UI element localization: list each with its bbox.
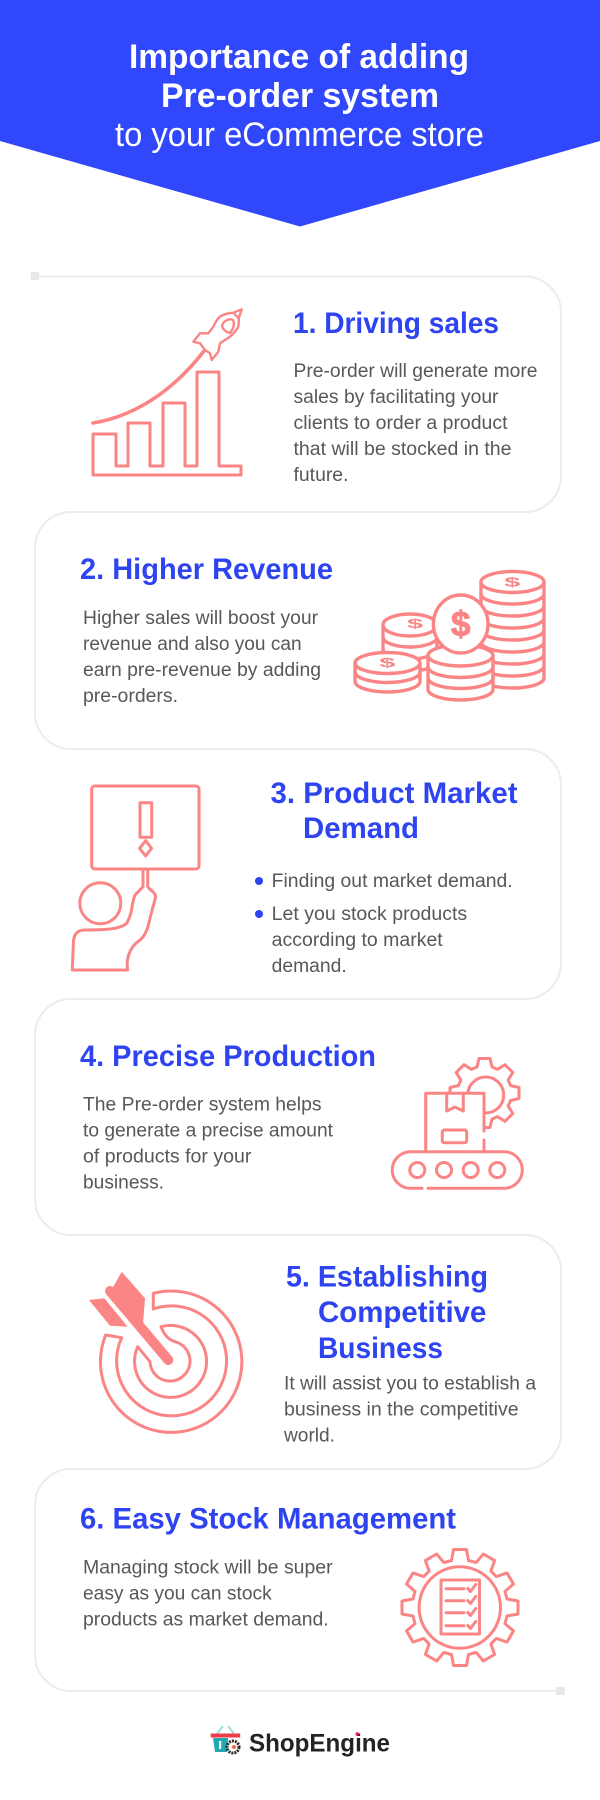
heading: Business (318, 1332, 443, 1365)
body text (283, 1374, 536, 1447)
panel: 4 precise production (80, 1040, 522, 1194)
body text: clients to order a product (294, 413, 508, 434)
heading (286, 1261, 488, 1365)
body text (294, 361, 538, 486)
title: Pre-order system (161, 77, 439, 115)
body text (83, 1095, 334, 1194)
body text: world. (283, 1426, 335, 1447)
heading (270, 777, 518, 845)
panel: 3 product market demand (72, 777, 518, 977)
body text: easy as you can stock (83, 1583, 272, 1604)
heading: 2. Higher Revenue (80, 553, 333, 586)
body text: of products for your (83, 1147, 252, 1168)
icon: coin stacks: $ (379, 656, 396, 670)
header banner (0, 0, 600, 226)
heading: 3. Product Market (270, 777, 518, 810)
icon: shopping basket with gear (211, 1726, 240, 1753)
icon: gear with checklist (402, 1550, 518, 1666)
bullet list: Let you stock products (272, 904, 467, 925)
serpentine card outline (31, 272, 565, 1695)
heading: 1. Driving sales (293, 307, 499, 340)
body text: pre-orders. (83, 686, 178, 707)
body text: products as market demand. (83, 1609, 329, 1630)
body text: Higher sales will boost your (83, 608, 319, 629)
panel: 2 higher revenue (80, 553, 544, 707)
bullet list (255, 871, 513, 977)
icon: rocket and bar chart (93, 309, 242, 475)
panel: 1 driving sales (93, 307, 538, 486)
icon: coin stacks: $ (451, 605, 470, 644)
icon: coin stacks: $ (407, 617, 424, 631)
heading: 4. Precise Production (80, 1040, 376, 1073)
title: Importance of adding (129, 38, 469, 76)
icon: coin stacks (355, 572, 544, 700)
title (115, 38, 484, 154)
icon: person holding sign (72, 786, 199, 970)
icon: target with arrow (89, 1272, 242, 1432)
title: to your eCommerce store (115, 116, 484, 154)
panel: 6 easy stock management (80, 1503, 518, 1666)
body text: sales by facilitating your (294, 387, 499, 408)
body text: earn pre-revenue by adding (83, 660, 321, 681)
heading: Demand (303, 812, 419, 845)
icon: coin stacks: $ (504, 575, 521, 589)
body text: business in the competitive (284, 1400, 519, 1421)
body text: that will be stocked in the (294, 439, 512, 460)
body text: business. (83, 1173, 164, 1194)
heading: 6. Easy Stock Management (80, 1503, 456, 1536)
icon: conveyor, box and gear (392, 1058, 522, 1188)
bullet list: according to market (272, 930, 443, 951)
body text (83, 1557, 333, 1630)
bullet list: Finding out market demand. (272, 871, 513, 892)
heading: Competitive (318, 1296, 486, 1329)
panel: 5 establishing competitive business (89, 1261, 536, 1447)
body text (83, 608, 321, 707)
body text: The Pre-order system helps (83, 1095, 322, 1116)
wordmark: ShopEngine (249, 1730, 390, 1758)
body text: to generate a precise amount (83, 1121, 334, 1142)
heading: 5. Establishing (286, 1261, 488, 1294)
bullet list: demand. (272, 956, 347, 977)
body text: Pre-order will generate more (294, 361, 538, 382)
body text: future. (294, 465, 348, 486)
body text: revenue and also you can (83, 634, 302, 655)
body text: It will assist you to establish a (284, 1374, 536, 1395)
logo: ShopEngine (211, 1726, 390, 1758)
body text: Managing stock will be super (83, 1557, 333, 1578)
